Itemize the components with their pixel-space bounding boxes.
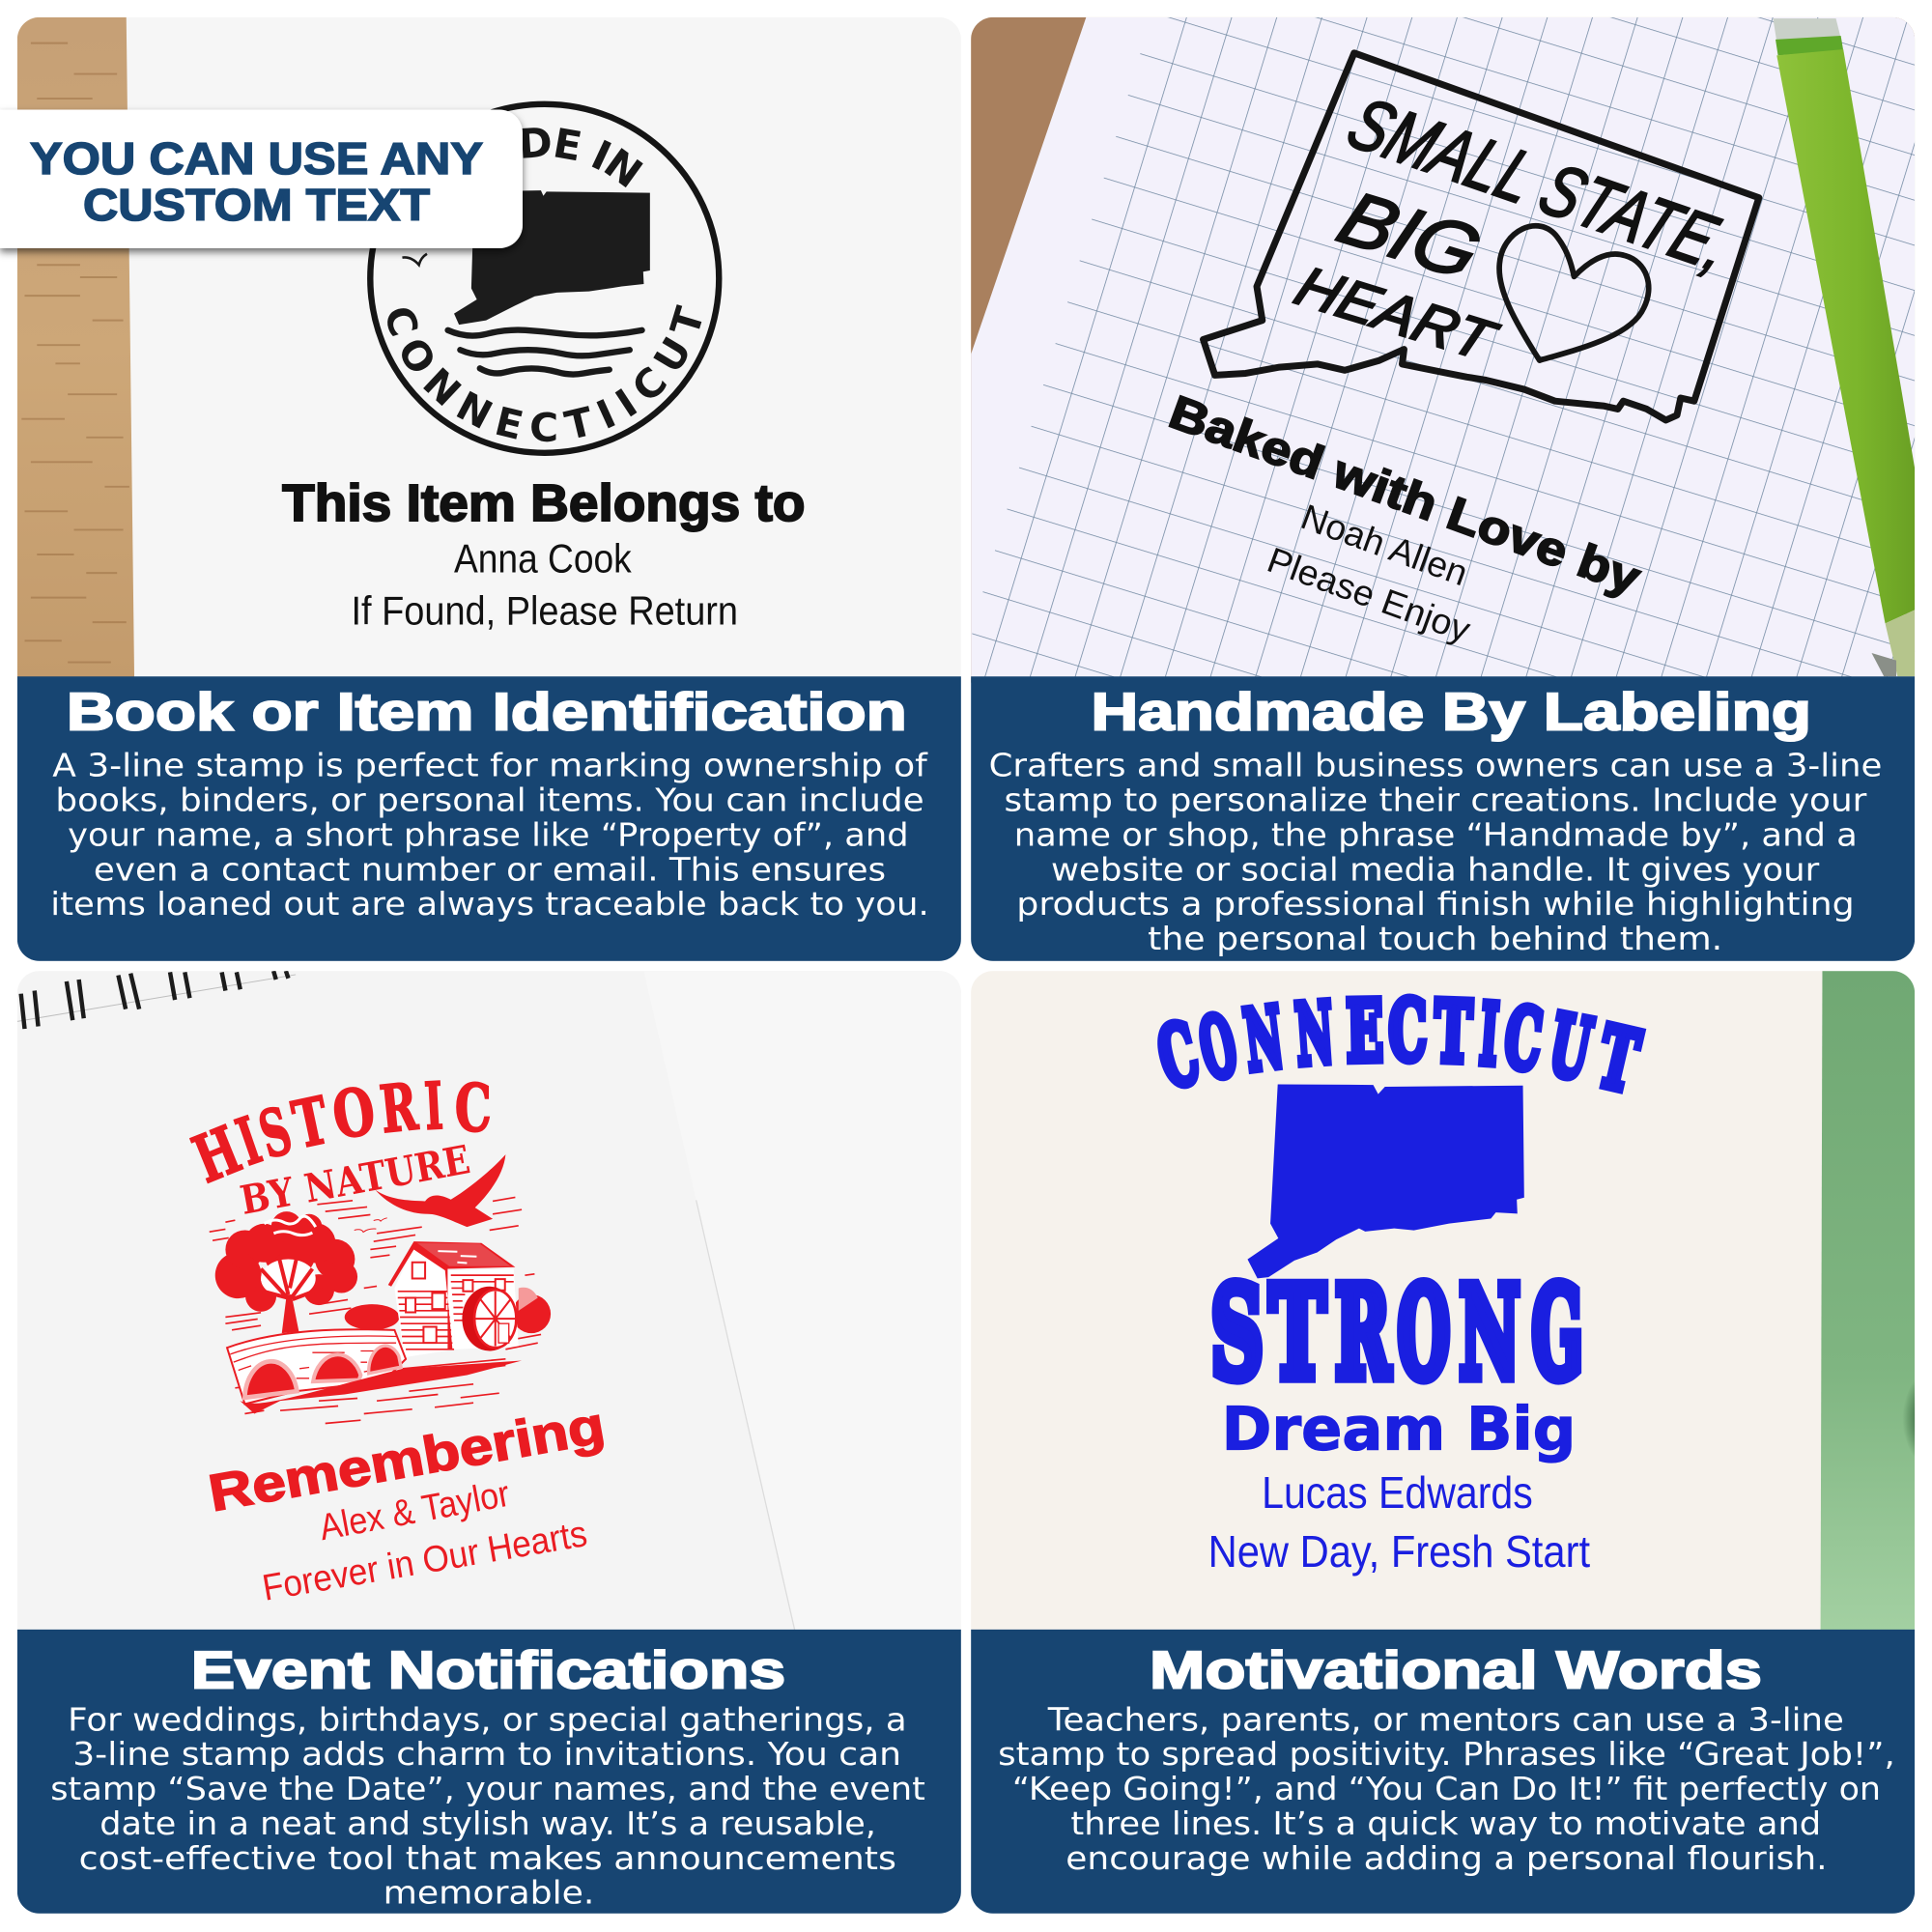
body text: “Keep Going!”, and “You Can Do It!” fit perfectly on <box>1012 1770 1881 1807</box>
stamp: Connecticut arched title: T <box>1589 1007 1647 1111</box>
stamp: Historic arched heading: I <box>228 1103 270 1181</box>
stamp text: Strong: G <box>1531 1260 1583 1407</box>
stamp: Historic arched heading: I <box>423 1068 445 1146</box>
stamp text: Remembering: Alex & Taylor <box>316 1473 513 1548</box>
body text: encourage while adding a personal flourish. <box>1065 1839 1828 1877</box>
stamp text: Strong: O <box>1398 1260 1450 1407</box>
bird <box>375 1154 505 1227</box>
spiral binding <box>17 971 296 1029</box>
stamp text: Strong: N <box>1459 1259 1520 1407</box>
stamp text: Remembering: Remembering <box>205 1397 609 1522</box>
icon: heart <box>1499 226 1649 360</box>
icon: Connecticut state silhouette <box>454 190 650 325</box>
stamp text: This Item Belongs to: Anna Cook <box>454 535 633 581</box>
body text <box>50 747 929 923</box>
stamp text: Baked with Love by: Please Enjoy <box>1263 540 1476 650</box>
body text: Teachers, parents, or mentors can use a 3-line <box>1047 1700 1844 1738</box>
stamp: Made in Connecticut badge: MADE IN <box>522 128 643 187</box>
stamp: Connecticut arched title: C <box>1388 981 1427 1080</box>
stamp text: Baked with Love by: Noah Allen <box>1296 497 1473 593</box>
stamp: Connecticut arched title: C <box>1499 989 1548 1090</box>
body text <box>989 747 1882 957</box>
stamp text: Remembering <box>209 1414 604 1600</box>
stamp: Connecticut arched title: C <box>1149 1005 1208 1108</box>
illustration: mill, tree, bridge and bird <box>210 1154 551 1423</box>
body text: three lines. It’s a quick way to motivate and <box>1070 1804 1821 1842</box>
stamp text: This Item Belongs to: If Found, Please Return <box>352 588 738 634</box>
panel: Event Notifications <box>17 971 961 1914</box>
body text: Crafters and small business owners can use a 3-line <box>989 747 1882 784</box>
icon: waves <box>448 330 642 375</box>
stamp: Historic arched heading: T <box>286 1082 335 1163</box>
mill <box>345 1241 551 1357</box>
stamp text: Remembering: Forever in Our Hearts <box>260 1513 590 1609</box>
stamp: Connecticut arched title: U <box>1542 996 1599 1099</box>
stamp: Connecticut arched title: E <box>1346 982 1384 1081</box>
caption: Book or Item Identification <box>17 676 961 961</box>
stamp text: Lucas Edwards: Lucas Edwards <box>1262 1467 1533 1518</box>
body text: books, binders, or personal items. You can include <box>55 781 924 818</box>
stamp text: Strong: R <box>1335 1259 1391 1407</box>
sky and water hatching <box>210 1197 541 1423</box>
stamp: Connecticut arched title: I <box>1477 984 1501 1084</box>
callout: You can use any custom text: CUSTOM TEXT <box>83 180 430 230</box>
stamp text: Strong: S <box>1210 1260 1264 1407</box>
stamp: Historic arched heading: H <box>184 1111 251 1198</box>
stamp: Small State, Big Heart outline <box>1204 53 1759 420</box>
body text <box>50 1700 925 1912</box>
stamp text: Big: BIG <box>1326 175 1493 295</box>
notebook paper <box>17 971 961 1636</box>
heading: Event Notifications <box>191 1639 785 1699</box>
panel: Book or Item Identification <box>17 17 961 961</box>
body text: website or social media handle. It gives your <box>1051 850 1820 888</box>
stamp: Made in Connecticut badge: CONNECTIICUT <box>387 304 701 442</box>
green pen <box>1773 18 1915 676</box>
stamp: Connecticut arched title: T <box>1433 981 1473 1081</box>
stamp text: Dream Big: Dream Big <box>1222 1396 1576 1464</box>
body text: A 3-line stamp is perfect for marking ownership of <box>52 747 928 784</box>
body text <box>998 1700 1895 1877</box>
green surface <box>1821 971 1932 1632</box>
stamp: Historic arched heading: S <box>251 1094 299 1174</box>
stamp: Connecticut arched title: O <box>1191 996 1245 1098</box>
caption: Event Notifications <box>17 1630 961 1914</box>
body text: date in a neat and stylish way. It’s a reusable, <box>99 1804 876 1842</box>
stamp: Historic arched heading <box>189 1080 491 1184</box>
stamp: Connecticut arched title <box>1149 981 1647 1111</box>
body text: For weddings, birthdays, or special gatherings, a <box>68 1700 907 1738</box>
body text: cost-effective tool that makes announcements <box>79 1839 896 1877</box>
panel: Motivational Words <box>971 971 1932 1914</box>
body text: memorable. <box>384 1874 594 1912</box>
body text: even a contact number or email. This ensures <box>94 850 886 888</box>
stamp text: This Item Belongs to: This Item Belongs to <box>282 475 806 532</box>
paper background <box>127 17 960 676</box>
stamp text: New Day, Fresh Start: New Day, Fresh Start <box>1208 1526 1590 1577</box>
callout: You can use any custom text: YOU CAN USE ANY <box>30 133 483 184</box>
stamp: By Nature subheading: BY NATURE <box>237 1136 473 1224</box>
heading: Motivational Words <box>1150 1639 1762 1699</box>
body text: stamp “Save the Date”, your names, and the event <box>50 1770 925 1807</box>
tree <box>215 1211 357 1333</box>
stamp text: Baked with Love by <box>1163 386 1647 650</box>
stamp: Connecticut arched title: N <box>1293 983 1337 1084</box>
cream paper <box>971 971 1824 1636</box>
wood surface <box>17 17 134 678</box>
icon: bird <box>402 254 427 265</box>
stamp: Connecticut arched title: N <box>1239 987 1288 1090</box>
callout: You can use any custom text <box>0 110 523 248</box>
body text: 3-line stamp adds charm to invitations. You can <box>72 1735 901 1773</box>
heading: Book or Item Identification <box>67 682 907 742</box>
grid notebook paper <box>971 17 1915 678</box>
body text: name or shop, the phrase “Handmade by”, and a <box>1014 816 1858 854</box>
stamp text: Heart: HEART <box>1287 256 1506 373</box>
stamp text: Small State: SMALL STATE, <box>1336 83 1744 286</box>
bridge <box>227 1329 522 1413</box>
stamp: Historic arched heading: R <box>377 1067 421 1149</box>
stamp text: Strong <box>1210 1259 1583 1407</box>
heading: Handmade By Labeling <box>1091 682 1811 742</box>
body text: products a professional finish while highlighting <box>1016 885 1855 923</box>
stamp: Historic arched heading: C <box>455 1069 492 1146</box>
body text: items loaned out are always traceable back to you. <box>50 885 929 923</box>
caption: Motivational Words <box>971 1630 1915 1914</box>
stamp text: Baked with Love by: Baked with Love by <box>1163 386 1647 605</box>
body text: your name, a short phrase like “Property of”, and <box>68 816 909 854</box>
body text: stamp to spread positivity. Phrases like “Great Job!”, <box>998 1735 1895 1773</box>
body text: the personal touch behind them. <box>1148 920 1722 957</box>
body text: stamp to personalize their creations. Include your <box>1005 781 1867 818</box>
stamp: Made in Connecticut badge <box>367 100 723 456</box>
stamp: Historic arched heading: O <box>327 1072 380 1154</box>
stamp text: This Item Belongs to <box>282 475 806 634</box>
kraft surface <box>971 17 1915 683</box>
icon: Connecticut state silhouette <box>1247 1084 1524 1278</box>
panel: Handmade By Labeling <box>971 17 1915 961</box>
caption: Handmade By Labeling <box>971 676 1915 961</box>
stamp text: Strong: T <box>1269 1260 1325 1407</box>
